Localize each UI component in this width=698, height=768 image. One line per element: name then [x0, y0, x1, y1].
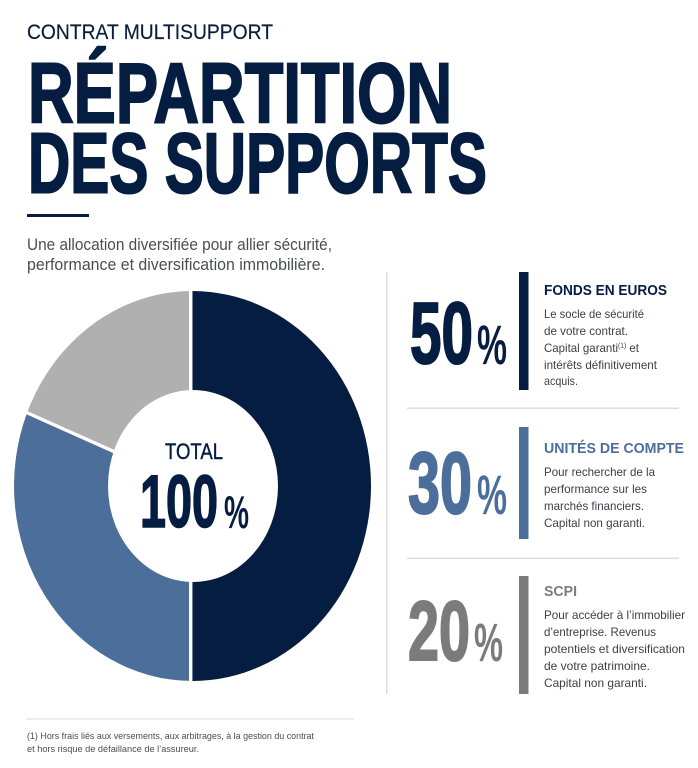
- percentage 20: 20: [408, 584, 470, 678]
- description: Capital non garanti.: [544, 676, 647, 690]
- description: de votre contrat.: [544, 324, 628, 338]
- description: [544, 465, 655, 530]
- description: d’entreprise. Revenus: [544, 625, 656, 639]
- description: marchés financiers.: [544, 499, 644, 513]
- row divider: [407, 408, 679, 409]
- description: [544, 307, 658, 388]
- row: fonds en euros: [410, 272, 667, 390]
- percentage 50: %: [477, 313, 507, 376]
- color bar: [519, 427, 528, 539]
- percentage 30: %: [477, 463, 507, 526]
- heading: FONDS EN EUROS: [544, 283, 667, 299]
- title: [28, 46, 487, 212]
- description: Le socle de sécurité: [544, 307, 644, 321]
- subtitle: [27, 236, 332, 274]
- heading: SCPI: [544, 584, 577, 600]
- footnote: [27, 718, 354, 754]
- donut hole: [108, 390, 278, 582]
- footnote text: et hors risque de défaillance de l’assureur.: [27, 744, 199, 754]
- description: Pour rechercher de la: [544, 465, 655, 479]
- slice: fonds en euros 50%: [192, 291, 371, 681]
- percentage 30: 30: [408, 435, 472, 532]
- heading: UNITÉS DE COMPTE: [544, 440, 684, 457]
- description: Capital non garanti.: [544, 516, 645, 530]
- center label: 100: [140, 460, 218, 543]
- title: DES SUPPORTS: [28, 116, 487, 212]
- row: SCPI: [408, 576, 685, 694]
- description: potentiels et diversification: [544, 642, 685, 656]
- description: et: [626, 341, 640, 355]
- footnote text: (1) Hors frais liés aux versements, aux arbitrages, à la gestion du contrat: [27, 731, 314, 741]
- description: Pour accéder à l’immobilier: [544, 608, 685, 622]
- center label: TOTAL: [165, 439, 223, 464]
- title: RÉPARTITION: [28, 46, 452, 142]
- color bar: [519, 576, 528, 694]
- description: de votre patrimoine.: [544, 659, 650, 673]
- percentage 20: %: [474, 613, 503, 673]
- subtitle: performance et diversification immobilière.: [27, 256, 325, 274]
- description: intérêts définitivement: [544, 358, 658, 372]
- row divider: [407, 558, 679, 559]
- description: performance sur les: [544, 482, 647, 496]
- color bar: [519, 272, 528, 390]
- eyebrow: CONTRAT MULTISUPPORT: [27, 20, 273, 44]
- description: (1): [618, 343, 626, 350]
- slice separators: [22, 285, 191, 686]
- slice: unités de compte 30%: [14, 413, 193, 681]
- description: [544, 608, 685, 690]
- donut chart: [14, 285, 371, 686]
- footnote rule: [27, 718, 354, 720]
- column divider: [386, 272, 388, 694]
- description: Capital garanti: [544, 341, 621, 355]
- header: [27, 20, 487, 274]
- row: unités de compte: [408, 427, 684, 539]
- percentage 50: 50: [410, 285, 473, 382]
- subtitle: Une allocation diversifiée pour allier sécurité,: [27, 236, 332, 254]
- center label: %: [224, 486, 249, 538]
- slice: SCPI 20%: [27, 291, 192, 486]
- description: acquis.: [544, 374, 578, 388]
- title rule: [27, 214, 89, 217]
- footnote text: [27, 731, 314, 754]
